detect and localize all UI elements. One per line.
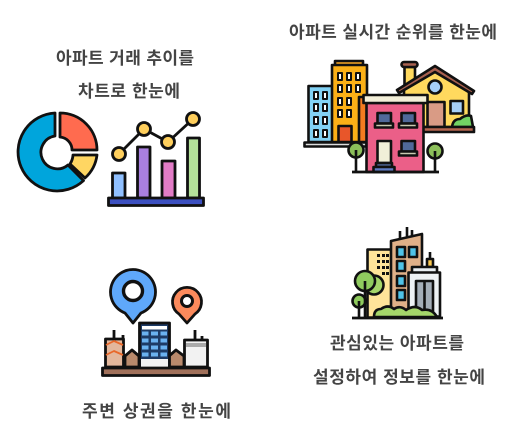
heading: favourite apartments: 관심있는 아파트를 (330, 334, 464, 353)
small houses (125, 350, 184, 367)
glass building (408, 267, 440, 316)
icon: map pins and town (102, 269, 210, 376)
blue building (308, 86, 332, 142)
heading: favourite apartments: 설정하여 정보를 한눈에 (313, 368, 485, 387)
right building (184, 330, 208, 367)
heading: favourite apartments (313, 334, 485, 387)
heading: nearby commerce: 주변 상권을 한눈에 (82, 402, 231, 421)
panel: nearby commerce (82, 269, 231, 421)
pink building (364, 95, 428, 172)
central tower (140, 323, 170, 367)
brown tower (391, 234, 422, 317)
heading: live ranking: 아파트 실시간 순위를 한눈에 (289, 23, 497, 42)
blue map pin (110, 269, 156, 323)
icon: donut chart (18, 113, 97, 191)
icon: apartment buildings and trees (352, 227, 443, 318)
panel: trade trend chart (18, 49, 204, 206)
orange tower (332, 61, 367, 142)
left building (106, 330, 124, 367)
panel: live ranking (289, 23, 497, 172)
trees (348, 142, 442, 172)
yellow building (368, 250, 392, 318)
heading: trade trend: 아파트 거래 추이를 (56, 49, 194, 68)
icon: town buildings (304, 61, 474, 172)
yellow house (397, 62, 474, 132)
icon: bar and line chart (108, 112, 204, 206)
trees (352, 271, 384, 318)
orange map pin (173, 287, 202, 323)
panel: favourite apartments (313, 227, 485, 387)
heading: trade trend: 차트로 한눈에 (78, 82, 180, 101)
bush (374, 306, 437, 317)
heading: trade trend (56, 49, 194, 101)
